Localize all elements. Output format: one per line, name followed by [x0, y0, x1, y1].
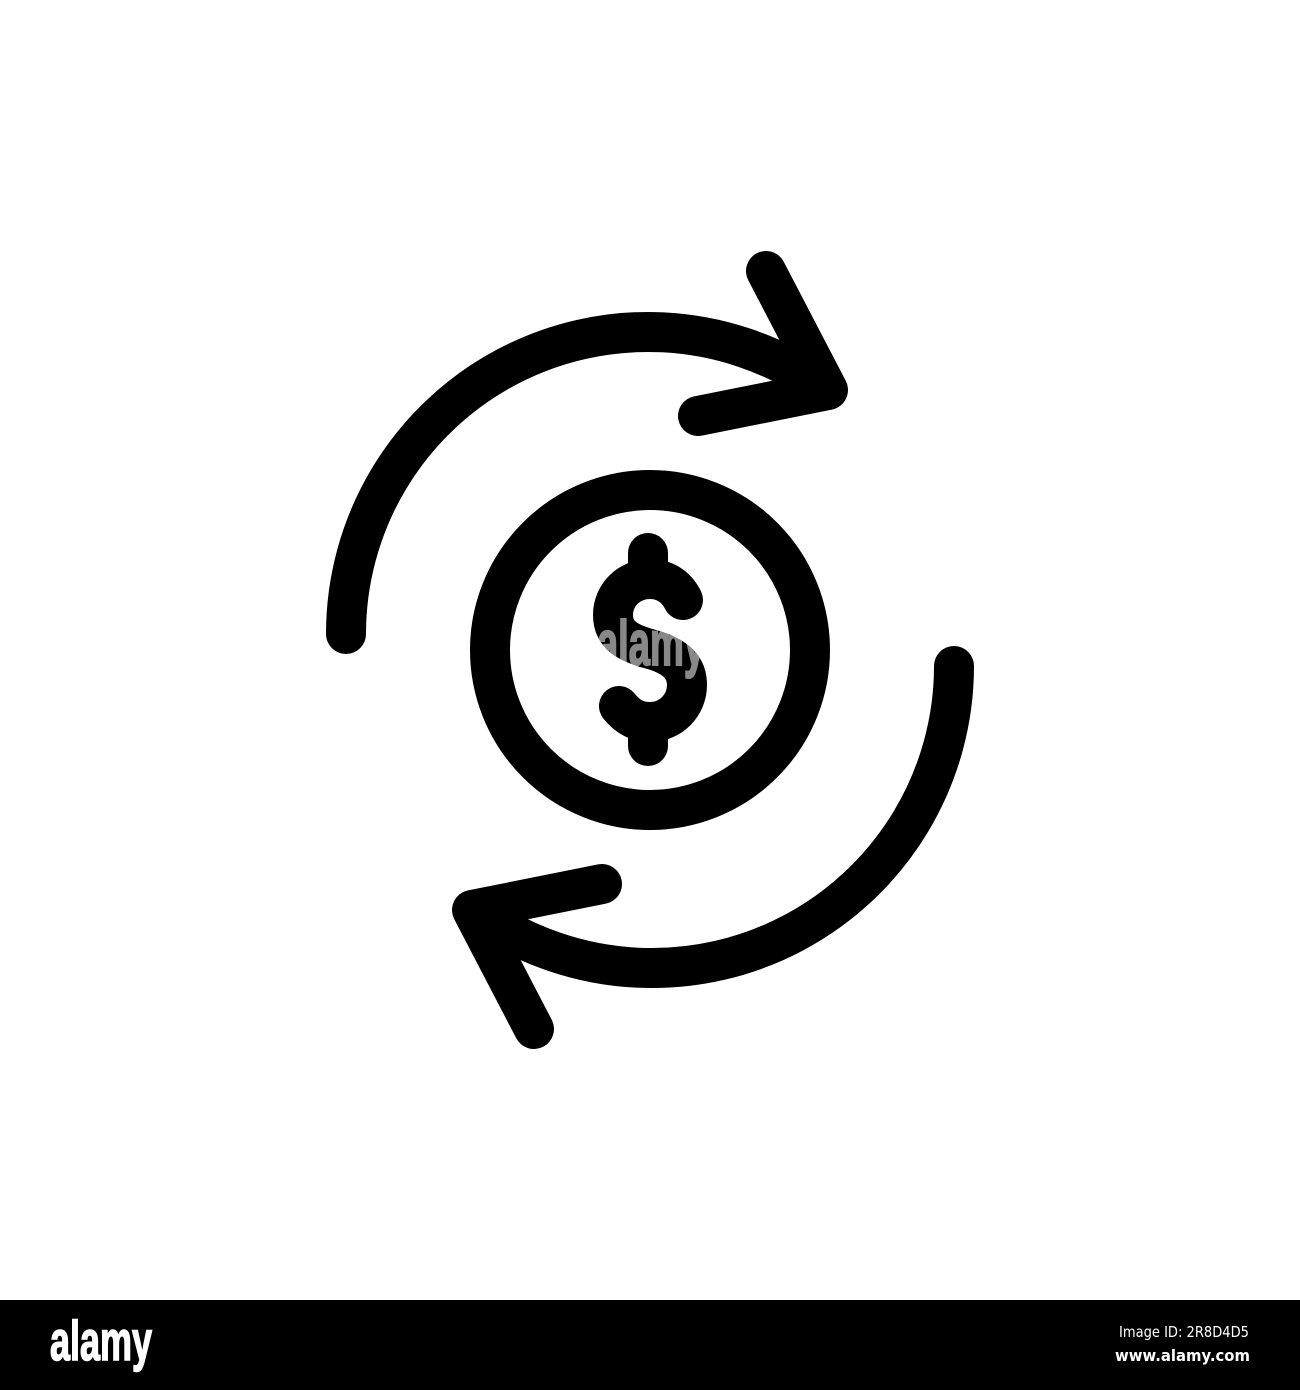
- icon: dollar sign: [613, 553, 687, 746]
- footer logo: alamy: alamy: [50, 1309, 152, 1372]
- footer text: website: www.alamy.com: [1115, 1346, 1250, 1365]
- footer text: image ID: Image ID: 2R8D4D5: [1119, 1323, 1249, 1341]
- icon: coin ring: [490, 490, 810, 810]
- footer bar: [0, 1300, 1300, 1390]
- arrow: top clockwise arc: [346, 271, 828, 634]
- watermark: alamy over the dollar sign: alamy: [597, 609, 705, 679]
- icon: money exchange cycle: [346, 271, 954, 1029]
- arrow: bottom clockwise arc: [472, 666, 954, 1029]
